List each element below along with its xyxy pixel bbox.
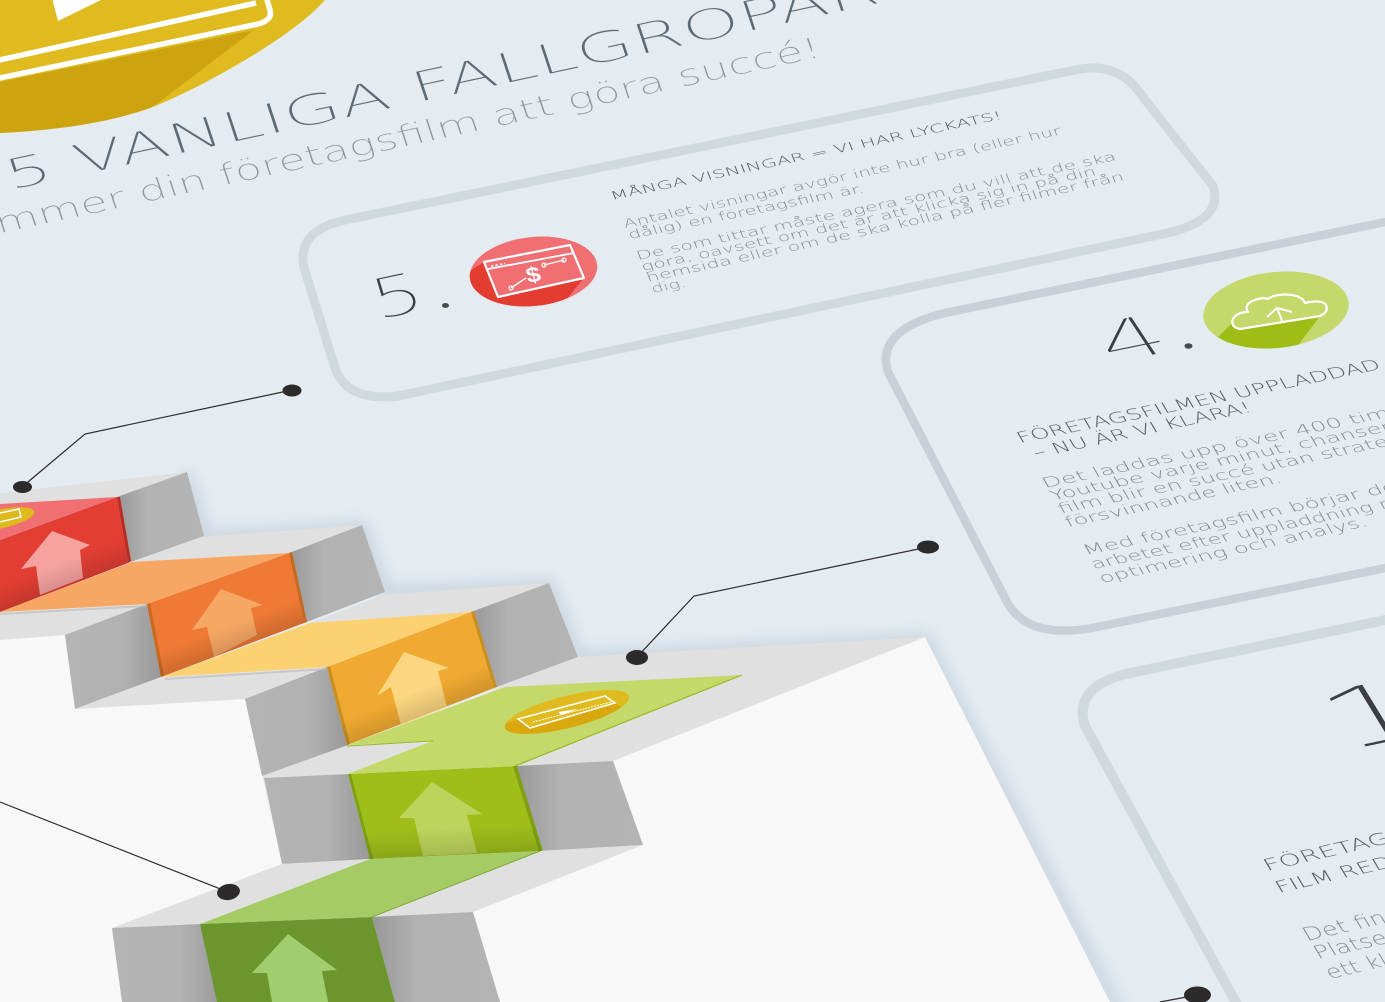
arrow: amber	[377, 652, 449, 725]
panel 4 text	[1012, 355, 1385, 587]
panel 5 text: hemsida eller om de ska kolla på fler filmer från	[644, 169, 1126, 285]
step 5: red stair	[0, 472, 204, 612]
step 4: orange stair	[0, 525, 385, 709]
panel 4 text: Youtube varje minut, chansen att din	[1047, 401, 1385, 504]
title: 5 VANLIGA FALLGROPAR	[0, 0, 885, 200]
panel 4 text: film blir en succé utan strategi är	[1055, 424, 1385, 517]
page shadow	[187, 474, 1118, 1002]
panel 5 frame	[303, 68, 1215, 397]
panel: step 1	[1083, 618, 1385, 1002]
callout: step 4 connector	[626, 540, 939, 665]
arrow: red	[21, 531, 90, 595]
panel 5 text: De som tittar måste agera som du vill att de ska	[634, 149, 1118, 263]
arrow: lime	[399, 782, 482, 856]
panel 5 text: dig.	[649, 276, 688, 296]
icon: browser with dollar: $	[524, 263, 543, 288]
callout: step 1 connector	[0, 802, 241, 902]
panel 4 text: försvinnande liten.	[1062, 471, 1285, 531]
white page area	[0, 635, 1110, 1002]
icon: yellow film circle	[0, 0, 325, 140]
arrow: green	[252, 934, 337, 1002]
icon: small film on lime	[504, 690, 630, 734]
step 2: lime stair	[262, 637, 925, 864]
panel 4 text: Med företagsfilm börjar det riktiga	[1080, 460, 1385, 559]
panel 5 number: 5	[362, 259, 432, 333]
panel 5 text	[608, 107, 1126, 296]
callout: panel 1 connector	[1160, 986, 1211, 1002]
icon: browser with dollar	[470, 236, 598, 306]
panel 5 text: dålig) en företagsfilm är.	[626, 181, 866, 242]
panel 4 text: arbetet efter uppladdning med	[1088, 488, 1385, 573]
icon: small film on red	[0, 502, 36, 536]
callout: step 5 connector	[13, 384, 302, 493]
panel 4 text: – NU ÄR VI KLARA!	[1028, 398, 1255, 462]
panel 1 text: FILM REDO	[1271, 848, 1385, 897]
panel 4 frame	[886, 220, 1385, 631]
panel 4 text: FÖRETAGSFILMEN UPPLADDAD	[1012, 355, 1384, 447]
panel 4 text: Det laddas upp över 400 timmar film till	[1039, 377, 1385, 492]
arrow: orange	[192, 589, 263, 657]
panel 1 frame	[1083, 618, 1385, 1002]
step 1: green stair	[112, 845, 643, 1002]
panel 4 number: 4	[1078, 302, 1184, 377]
panel 5 text: Antalet visningar avgör inte hur bra (eller hur	[621, 124, 1063, 231]
icon: cloud upload	[1203, 272, 1349, 348]
panel: step 4	[886, 220, 1385, 631]
panel 5 text: göra, oavsett om det är att klicka sig in på din	[639, 164, 1098, 274]
step 3: amber stair	[75, 583, 578, 776]
panel 5 text: MÅNGA VISNINGAR = VI HAR LYCKATS!	[608, 107, 1004, 203]
panel: step 5	[303, 68, 1215, 397]
panel 4 text: optimering och analys.	[1096, 515, 1371, 587]
panel 1 text	[1259, 802, 1385, 984]
